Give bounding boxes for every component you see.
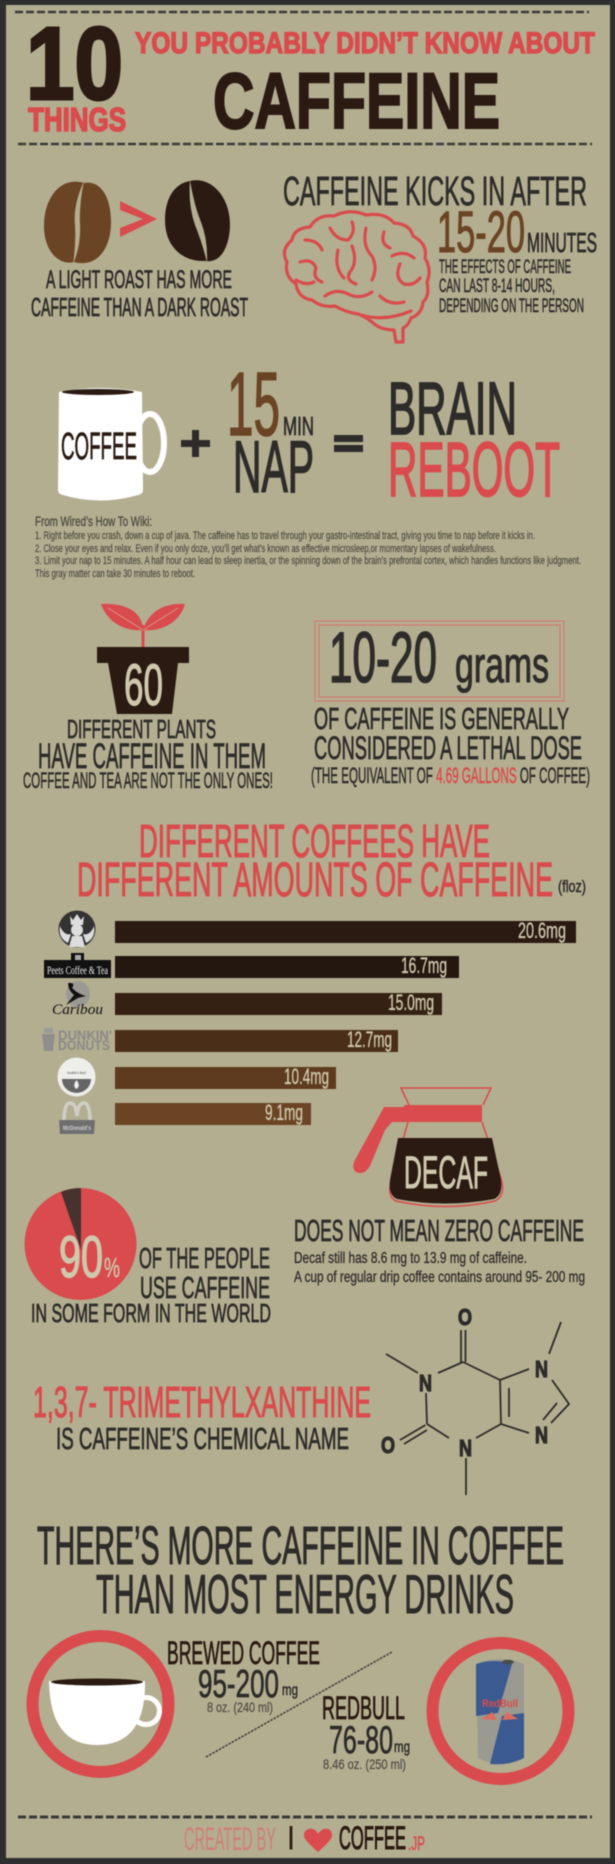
text: trimethylxanthine: 1,3,7- TRIMETHYLXANTHINE [33,1378,371,1427]
bar: 16.7mg [115,953,459,978]
text: 15 min nap: NAP [233,427,314,508]
pie chart: 90 percent: % [104,1252,120,1283]
text: 15 min nap [227,355,314,508]
text: different plants: HAVE CAFFEINE IN THEM [38,737,266,776]
text: brewed coffee: mg [282,1682,298,1699]
panel: caffeine kicks in [283,168,597,342]
heading: more caffeine in coffee [37,1516,564,1625]
text: different plants: DIFFERENT PLANTS [67,714,216,744]
text: brewed coffee [167,1635,320,1715]
text: of the people: OF THE PEOPLE [139,1243,270,1275]
chart: caffeine molecule: O [458,1304,472,1330]
text: of the people: IN SOME FORM IN THE WORLD [31,1298,271,1328]
bar: 20.6mg: 20.6mg [518,918,566,943]
heading: different coffees [77,815,586,907]
text: roast caption [31,266,248,322]
chart: caffeine molecule [381,1304,569,1495]
footer: created by: CREATED BY [184,1821,276,1857]
icon: Dunkin' Donuts: DUNKIN' [58,1027,112,1043]
text: brain reboot [388,367,560,513]
chart: caffeine molecule: N [535,1422,548,1448]
text: 15 min nap: 15 [227,355,280,455]
text: does not mean zero caffeine: Decaf still has 8.6 mg to 13.9 mg of caffeine. [294,1250,527,1267]
icon: brain [284,212,429,342]
icon: Peet's Coffee and Tea: Peets Coffee & Tea [47,963,108,977]
icon: Caribou Coffee [52,981,103,1018]
text: 15 min nap: MIN [283,411,314,441]
icon: Starbucks [58,910,96,948]
icon: McDonald's [59,1103,95,1134]
text: different plants [23,714,273,793]
pie chart: 90 percent [24,1188,136,1300]
bar: 20.6mg [115,918,576,943]
text: does not mean zero caffeine [294,1214,585,1286]
icon: coffee mug: COFFEE [61,426,137,468]
icon: Caribou Coffee: Caribou [52,1002,103,1018]
bar: 15.0mg: 15.0mg [388,990,434,1015]
divider: dashed diagonal [206,1652,392,1757]
icon: Seattle's Best Coffee [58,1058,96,1096]
title: THINGS [28,101,126,138]
stat: 15-20 minutes: 15-20 [437,200,525,265]
panel: chemical name [33,1304,569,1495]
bar: 10.4mg [115,1064,336,1089]
bar: 9.1mg: 9.1mg [265,1100,303,1125]
text block: from Wired's How To Wiki [35,513,581,580]
text: effects duration [439,257,584,317]
icon: coffee mug [58,388,164,500]
text: redbull: mg [394,1739,410,1756]
text: roast caption: A LIGHT ROAST HAS MORE [46,266,232,294]
icon: greater than sign [120,201,157,237]
text: roast caption: CAFFEINE THAN A DARK ROAST [31,294,248,322]
panel: lethal dose [311,619,590,788]
chart: caffeine molecule: N [419,1370,432,1396]
icon: Seattle's Best Coffee: Seattle's Best [67,1071,86,1075]
title: CAFFEINE [213,56,500,145]
icon: Dunkin' Donuts [42,1027,112,1053]
callout: 10-20 grams box: grams [455,637,549,693]
icon: plant in pot: 60 [124,653,163,718]
icon: equals sign [334,435,363,452]
text: different plants: COFFEE AND TEA ARE NOT THE ONLY ONES! [23,768,273,793]
icon: Dunkin' Donuts: DONUTS [58,1037,110,1053]
text: redbull: 76-80 [329,1719,393,1762]
text: brewed coffee: BREWED COFFEE [167,1635,320,1671]
icon: McDonald's: McDonald's [63,1126,92,1132]
text: redbull [322,1690,410,1772]
text: of the people [31,1243,271,1328]
icon: plant in pot [97,604,189,718]
text: lethal dose [311,702,590,788]
icon: decaf carafe: DECAF [404,1147,488,1198]
icon: light roast bean [44,181,111,264]
text: redbull: 8.46 oz. (250 ml) [323,1756,406,1772]
panel: light versus dark roast [31,180,248,322]
icon: dark roast bean [165,180,230,263]
bar: 9.1mg [115,1100,311,1125]
icon: Peet's Coffee and Tea [44,953,111,978]
icon: heart [304,1829,332,1852]
chart: caffeine molecule: N [459,1435,472,1461]
heading: different coffees: (floz) [558,877,586,896]
icon: decaf carafe [353,1088,503,1206]
bar: 12.7mg: 12.7mg [347,1027,392,1052]
bar: 16.7mg: 16.7mg [401,953,447,978]
text: trimethylxanthine: IS CAFFEINE’S CHEMICAL NAME [56,1422,349,1456]
text block: from Wired's How To Wiki: From Wired’s How To Wiki: [35,513,152,529]
panel: 60 plants [23,604,273,793]
footer: created by: COFFEE [339,1820,406,1856]
text: brain reboot: BRAIN [388,367,517,450]
panel: decaf [294,1088,585,1286]
text block: from Wired's How To Wiki: This gray matter can take 30 minutes to reboot. [35,568,195,580]
chart: caffeine molecule: N [535,1356,548,1382]
logos: coffee brands [42,910,112,1134]
bar: 10.4mg: 10.4mg [284,1064,329,1089]
callout: 10-20 grams box: 10-20 [329,619,437,698]
icon: energy drink can in ring [432,1643,568,1779]
text: redbull: REDBULL [322,1690,405,1726]
text: brewed coffee: 8 oz. (240 ml) [207,1699,273,1715]
bar: 12.7mg [115,1027,398,1052]
footer: created by: I [288,1820,294,1856]
text: brewed coffee: 95-200 [198,1663,279,1706]
panel: coffee nap equation [58,355,560,513]
icon: coffee cup in ring [32,1636,168,1772]
bar chart: caffeine per brand [115,918,576,1125]
footer: created by: .JP [408,1834,425,1855]
icon: energy drink can in ring: RedBull [482,1698,518,1710]
text: trimethylxanthine [33,1378,371,1456]
pie chart: 90 percent: 90 [59,1225,103,1290]
icon: plus sign [181,430,210,457]
bar: 15.0mg [115,990,442,1015]
title [26,6,595,145]
panel: coffee versus energy drink [32,1635,568,1779]
chart: caffeine molecule: O [381,1432,395,1458]
title: 10 [26,6,123,121]
text: of the people: USE CAFFEINE [140,1271,270,1305]
panel: 90 percent [24,1188,271,1328]
